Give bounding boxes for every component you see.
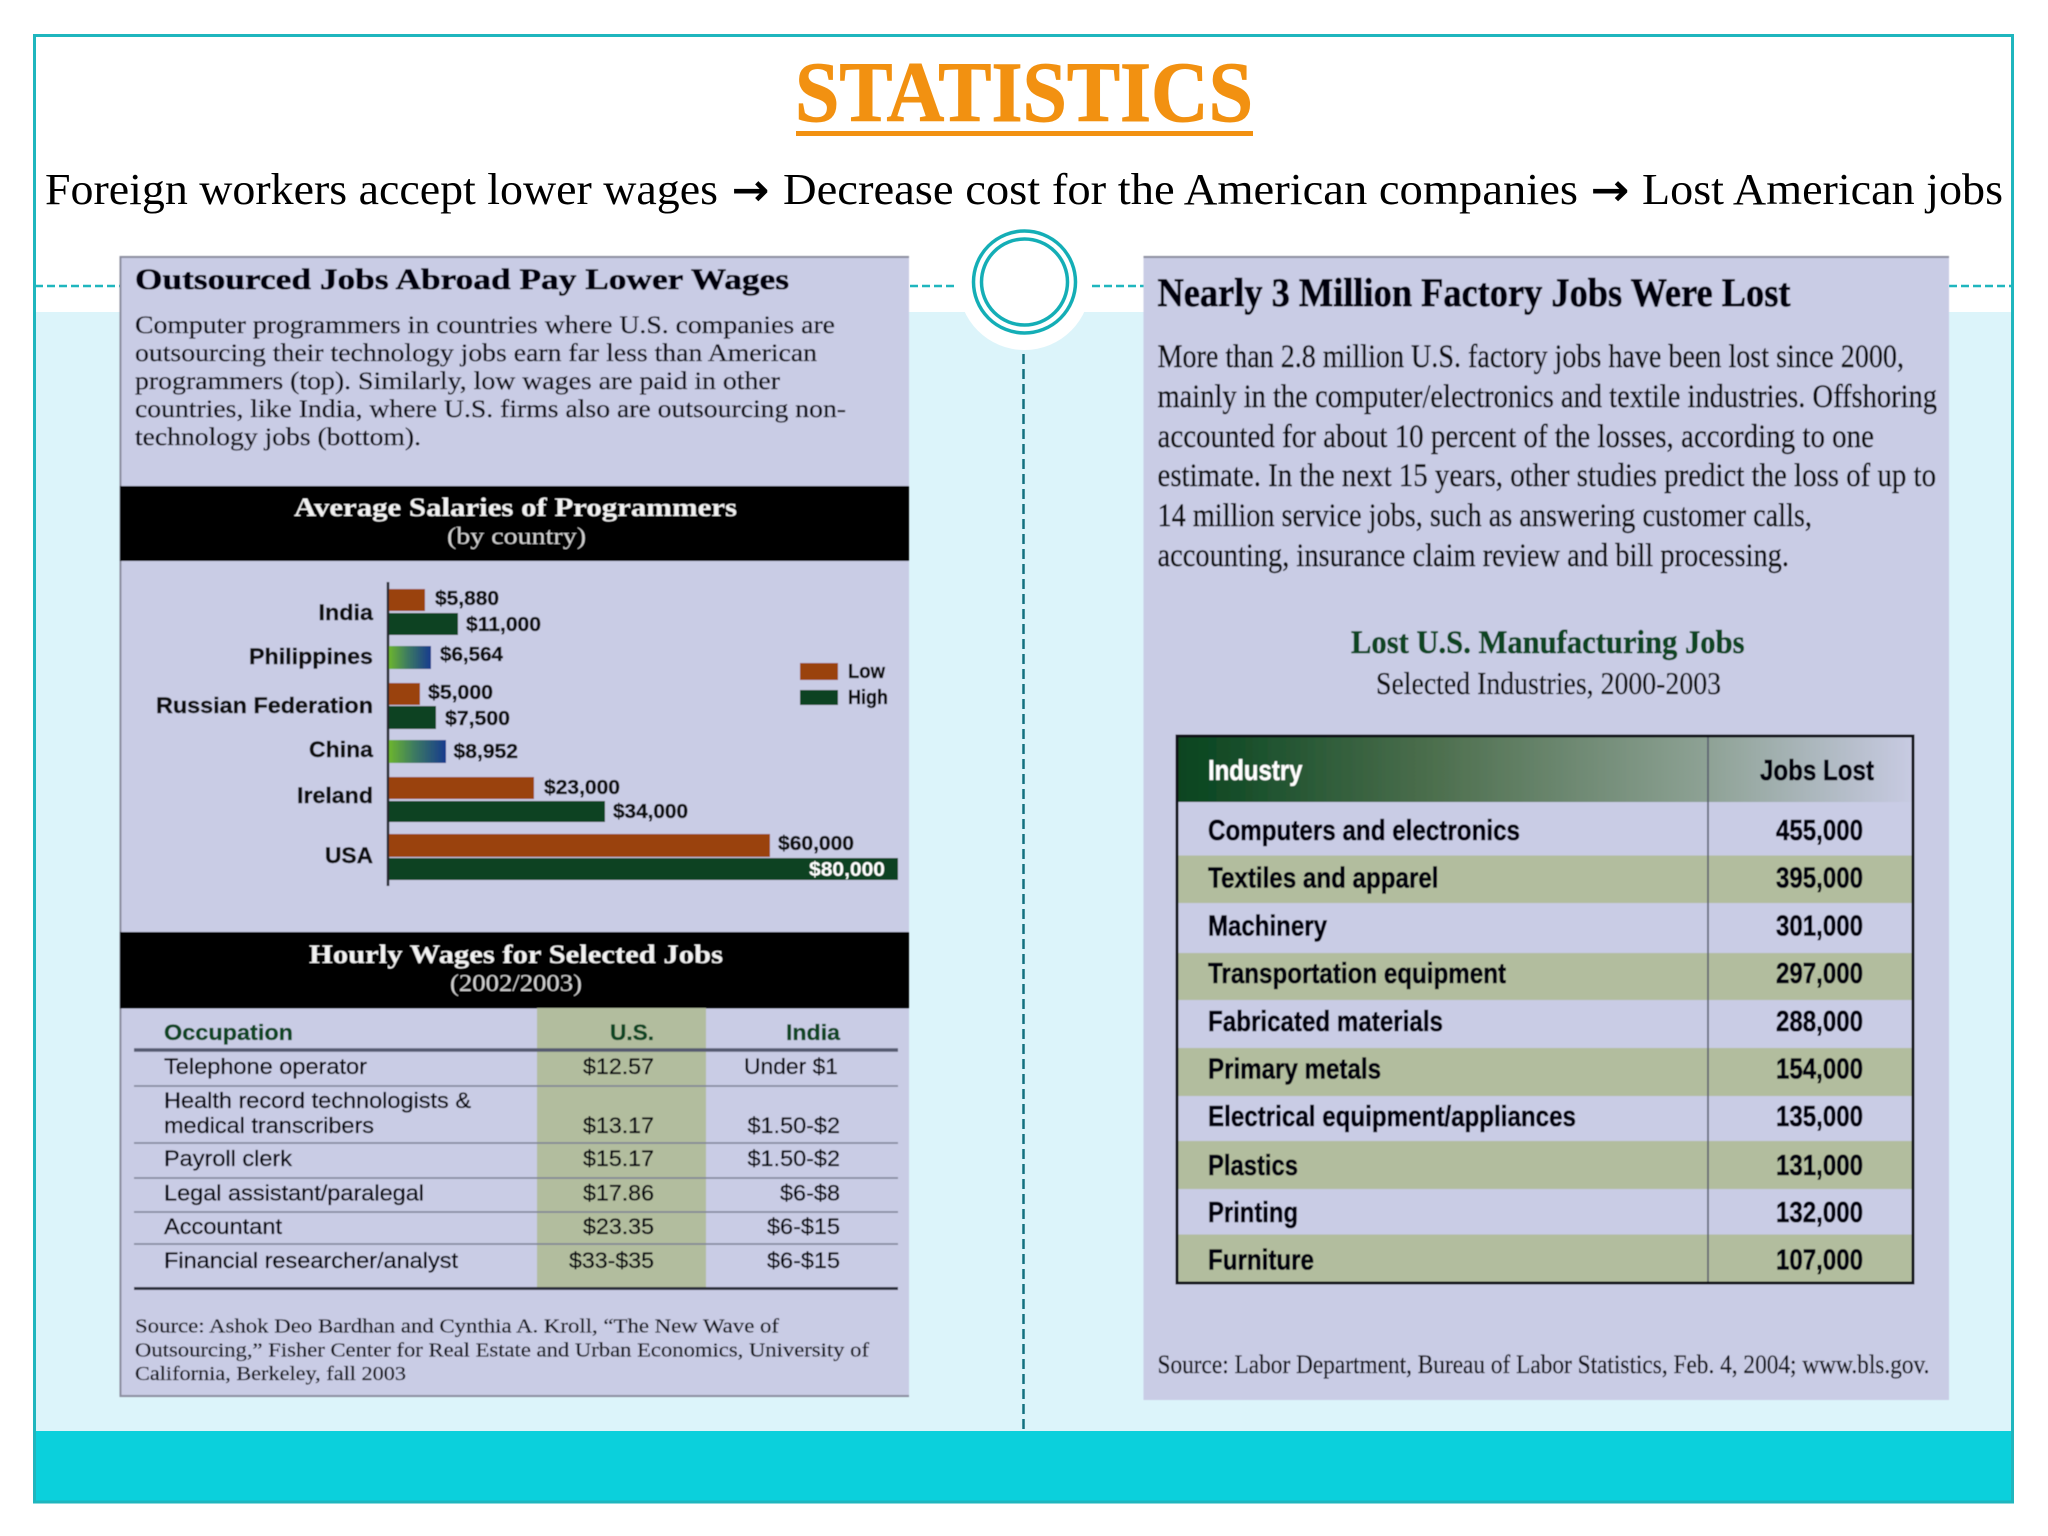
table: hourly wages: India [786, 1020, 841, 1045]
band: average salaries [120, 486, 909, 561]
table: hourly wages: $13.17 [583, 1113, 654, 1138]
centre ring icon [958, 218, 1090, 350]
table: lost jobs by industry: 154,000 [1776, 1054, 1863, 1086]
table: lost jobs by industry: Printing [1208, 1197, 1298, 1229]
table: hourly wages: Health record technologists & [164, 1088, 471, 1113]
table: lost jobs by industry: 455,000 [1776, 815, 1863, 847]
body text: 14 million service jobs, such as answering customer calls, [1158, 498, 1812, 534]
intro text: technology jobs (bottom). [135, 424, 421, 451]
table: hourly wages: Financial researcher/analyst [164, 1248, 458, 1273]
table: hourly wages: $23.35 [583, 1214, 654, 1239]
body text [1158, 339, 1937, 574]
table: hourly wages: $15.17 [583, 1146, 654, 1171]
chart legend [800, 661, 888, 709]
table: lost jobs by industry: 107,000 [1776, 1244, 1863, 1276]
bar chart: programmer salaries: $5,000 [428, 682, 493, 704]
source note: labor department: Source: Labor Department, Bureau of Labor Statistics, Feb. 4, 2004; www.bls.gov. [1158, 1350, 1930, 1379]
bar chart: programmer salaries: $23,000 [544, 777, 620, 799]
heading: factory jobs: Nearly 3 Million Factory Jobs Were Lost [1158, 270, 1791, 315]
table: lost jobs by industry: Textiles and apparel [1208, 862, 1438, 894]
table: lost jobs by industry: Computers and electronics [1208, 815, 1520, 847]
subtitle flow: Lost American jobs [1642, 165, 2003, 214]
bar chart: programmer salaries: $11,000 [466, 614, 541, 636]
table: lost jobs by industry: Primary metals [1208, 1054, 1381, 1086]
table: hourly wages: $12.57 [583, 1054, 654, 1079]
bar chart: programmer salaries: $80,000 [809, 859, 885, 881]
table: hourly wages: $6-$8 [780, 1180, 840, 1206]
intro text: Computer programmers in countries where U.S. companies are [135, 312, 835, 339]
band: average salaries: (by country) [447, 524, 586, 550]
table: lost jobs by industry: Transportation equipment [1208, 958, 1506, 990]
band: hourly wages [120, 932, 909, 1008]
table: hourly wages: $1.50-$2 [748, 1113, 840, 1138]
bar chart: programmer salaries: $8,952 [454, 741, 518, 763]
table: hourly wages: Under $1 [744, 1054, 838, 1079]
chart legend: High [848, 687, 888, 709]
bar chart: programmer salaries: China [309, 737, 374, 762]
table: hourly wages: $17.86 [583, 1180, 654, 1206]
intro text: outsourcing their technology jobs earn far less than American [135, 340, 818, 367]
source note: outsourcing [135, 1316, 869, 1385]
table: lost jobs by industry: Electrical equipment/appliances [1208, 1101, 1576, 1133]
table: hourly wages: Payroll clerk [164, 1146, 293, 1171]
subtitle flow: Decrease cost for the American companies [783, 165, 1578, 214]
title: STATISTICS [795, 44, 1253, 140]
table: hourly wages: Occupation [164, 1020, 293, 1045]
table: lost jobs by industry: 288,000 [1776, 1006, 1863, 1038]
bar chart: programmer salaries: Philippines [249, 644, 373, 669]
band: hourly wages: Hourly Wages for Selected Jobs [309, 940, 723, 969]
table: lost jobs by industry: 395,000 [1776, 862, 1863, 894]
table: lost jobs by industry: 131,000 [1776, 1150, 1863, 1182]
table: lost jobs by industry: 135,000 [1776, 1101, 1863, 1133]
bar chart: programmer salaries: $60,000 [778, 833, 854, 855]
bar chart: programmer salaries: $5,880 [435, 588, 499, 610]
panel: outsourced jobs [120, 256, 909, 1397]
source note: outsourcing: California, Berkeley, fall 2003 [135, 1363, 406, 1385]
bar chart: programmer salaries: $6,564 [440, 644, 504, 666]
source note: outsourcing: Outsourcing,” Fisher Center for Real Estate and Urban Economics, University of [135, 1340, 869, 1362]
table: lost jobs by industry: Machinery [1208, 910, 1327, 942]
body text: estimate. In the next 15 years, other studies predict the loss of up to [1158, 458, 1936, 494]
bar chart: programmer salaries: $34,000 [613, 801, 688, 823]
chart title: lost manufacturing jobs [1351, 625, 1745, 701]
bar chart: programmer salaries: Russian Federation [156, 693, 373, 718]
bar chart: programmer salaries: $7,500 [445, 708, 510, 730]
table: lost jobs by industry: 301,000 [1776, 910, 1863, 942]
intro text [135, 312, 846, 451]
body text: accounted for about 10 percent of the losses, according to one [1158, 419, 1874, 455]
table: hourly wages: U.S. [610, 1020, 654, 1045]
centre vertical dashed divider [1022, 354, 1025, 1431]
bar chart: programmer salaries: USA [325, 843, 373, 868]
table: hourly wages: $6-$15 [767, 1214, 840, 1239]
table: hourly wages: $33-$35 [569, 1248, 654, 1273]
table: hourly wages: Legal assistant/paralegal [164, 1180, 424, 1206]
table: lost jobs by industry: Plastics [1208, 1150, 1298, 1182]
table: lost jobs by industry: Fabricated materials [1208, 1006, 1443, 1038]
table: hourly wages: Accountant [164, 1214, 282, 1239]
bar chart: programmer salaries: Ireland [297, 783, 373, 808]
table: hourly wages [134, 1008, 898, 1288]
dashed connector lines [35, 285, 2012, 287]
subtitle flow [45, 165, 2003, 216]
heading: outsourced jobs: Outsourced Jobs Abroad Pay Lower Wages [135, 263, 789, 296]
bar chart: programmer salaries [156, 582, 898, 886]
table: hourly wages: $1.50-$2 [748, 1146, 840, 1171]
table: lost jobs by industry: Jobs Lost [1760, 755, 1874, 787]
body text: More than 2.8 million U.S. factory jobs have been lost since 2000, [1158, 339, 1904, 375]
band: average salaries: Average Salaries of Programmers [294, 493, 737, 522]
panel: factory jobs [1144, 256, 1949, 1400]
intro text: countries, like India, where U.S. firms also are outsourcing non- [135, 396, 846, 423]
subtitle flow: → [1591, 165, 1629, 216]
body text: accounting, insurance claim review and bill processing. [1158, 538, 1789, 574]
bar chart: programmer salaries: India [318, 600, 374, 625]
subtitle flow: → [732, 165, 769, 216]
chart legend: Low [848, 661, 885, 683]
table: hourly wages: medical transcribers [164, 1113, 374, 1138]
table: lost jobs by industry: Furniture [1208, 1244, 1314, 1276]
subtitle flow: Foreign workers accept lower wages [45, 165, 718, 214]
table: hourly wages: Telephone operator [164, 1054, 367, 1079]
intro text: programmers (top). Similarly, low wages are paid in other [135, 368, 781, 395]
table: lost jobs by industry: 297,000 [1776, 958, 1863, 990]
table: hourly wages: $6-$15 [767, 1248, 840, 1273]
table: lost jobs by industry: 132,000 [1776, 1197, 1863, 1229]
chart title: lost manufacturing jobs: Selected Industries, 2000-2003 [1376, 665, 1721, 701]
chart title: lost manufacturing jobs: Lost U.S. Manufacturing Jobs [1351, 625, 1745, 661]
source note: outsourcing: Source: Ashok Deo Bardhan and Cynthia A. Kroll, “The New Wave of [135, 1316, 779, 1338]
band: hourly wages: (2002/2003) [450, 971, 582, 997]
table: lost jobs by industry [1177, 736, 1914, 1283]
table: lost jobs by industry: Industry [1208, 755, 1302, 787]
body text: mainly in the computer/electronics and textile industries. Offshoring [1158, 379, 1937, 415]
